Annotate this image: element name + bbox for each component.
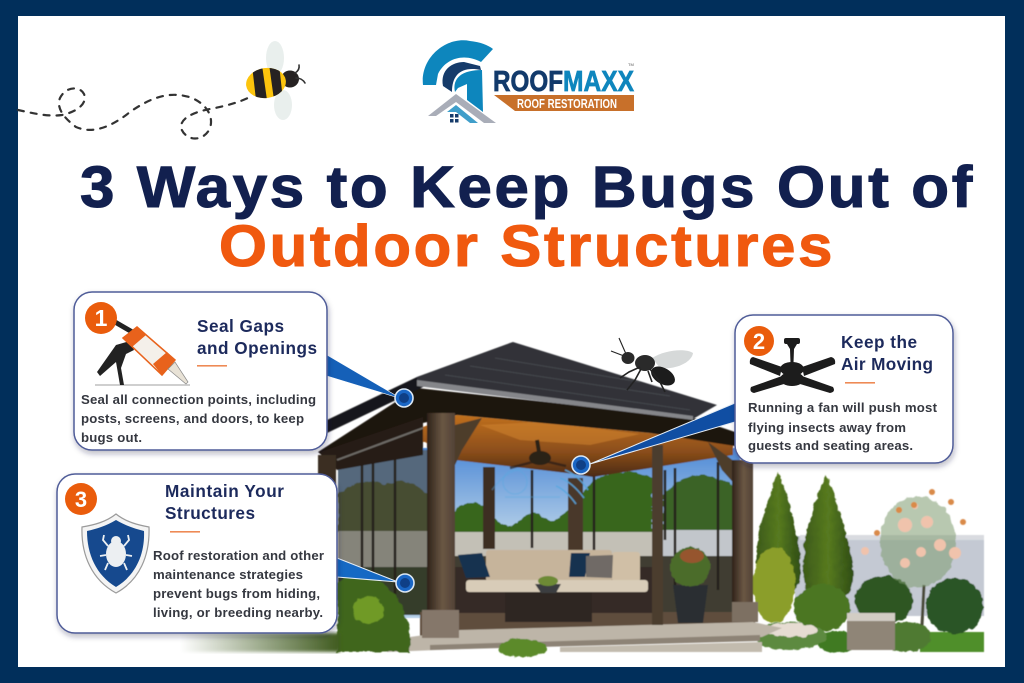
icon: shield with bug <box>82 514 149 593</box>
heading: Seal Gaps <box>197 316 284 336</box>
callout pointer 1 <box>327 355 413 407</box>
body text: bugs out. <box>81 430 142 445</box>
callout pointer 2 <box>572 403 735 474</box>
body text: posts, screens, and doors, to keep <box>81 411 304 426</box>
title: 3 Ways to Keep Bugs Out of <box>80 155 975 220</box>
icon: caulk gun <box>95 322 190 385</box>
body text: Running a fan will push most <box>748 400 938 415</box>
shrubs <box>753 547 984 653</box>
heading: Maintain Your <box>165 481 284 501</box>
front posts <box>318 413 758 638</box>
number badge 3: 3 <box>75 487 87 512</box>
flowering tree <box>861 489 966 625</box>
body text: Seal all connection points, including <box>81 392 316 407</box>
dashed bee flight path <box>18 88 250 138</box>
view through screens <box>338 448 740 618</box>
wasp <box>611 338 693 392</box>
floor <box>420 612 756 638</box>
panel: step 2 keep air moving <box>735 315 953 463</box>
logo tagline band <box>494 95 634 111</box>
number badge 1 <box>85 302 117 334</box>
heading: and Openings <box>197 338 317 358</box>
body text <box>748 400 938 453</box>
title: Outdoor Structures <box>219 214 835 279</box>
logo: Roof Maxx: MAXX <box>563 66 635 98</box>
heading: Keep the <box>841 332 917 352</box>
icon: bee <box>244 41 305 120</box>
gazebo scene <box>318 342 984 657</box>
body text: guests and seating areas. <box>748 438 913 453</box>
panel: step 1 seal gaps <box>74 292 327 450</box>
heading <box>197 316 317 358</box>
screen mullions <box>362 436 718 605</box>
logo: Roof Maxx: TM <box>628 62 634 67</box>
potted plant <box>670 547 710 623</box>
logo tagline band: ROOF RESTORATION <box>517 97 617 111</box>
stone planter wall <box>847 613 895 650</box>
title <box>80 155 975 279</box>
logo: Roof Maxx <box>423 40 635 123</box>
sofa <box>455 550 655 622</box>
body text <box>153 548 324 620</box>
number badge 1: 1 <box>95 305 108 331</box>
heading <box>165 481 284 523</box>
body text <box>81 392 316 445</box>
body text: living, or breeding nearby. <box>153 605 323 620</box>
lawn <box>920 632 984 652</box>
garden wall <box>795 535 984 616</box>
heading: Air Moving <box>841 354 933 374</box>
left shrub <box>337 573 410 652</box>
icon: ceiling fan <box>750 338 835 393</box>
body text: prevent bugs from hiding, <box>153 586 320 601</box>
ceiling <box>380 415 733 477</box>
number badge 3 <box>65 483 97 515</box>
callout pointer 3 <box>337 558 414 592</box>
heading: Structures <box>165 503 255 523</box>
flower bed <box>754 622 826 650</box>
steps <box>387 622 782 652</box>
icon: spartan helmet with roof <box>423 40 496 123</box>
body text: flying insects away from <box>748 420 906 435</box>
back posts <box>483 467 583 553</box>
small shrub at steps <box>498 639 546 657</box>
number badge 2: 2 <box>753 329 765 354</box>
ceiling fan <box>492 440 588 504</box>
body text: maintenance strategies <box>153 567 303 582</box>
heading <box>841 332 933 374</box>
logo wordmark: ROOF <box>493 66 563 98</box>
body text: Roof restoration and other <box>153 548 324 563</box>
roof beams <box>318 388 738 488</box>
panel: step 3 maintain structures <box>57 474 337 633</box>
roof <box>327 342 717 433</box>
evergreen trees <box>756 472 853 600</box>
soft green ground fade <box>180 633 340 652</box>
number badge 2 <box>744 326 774 356</box>
